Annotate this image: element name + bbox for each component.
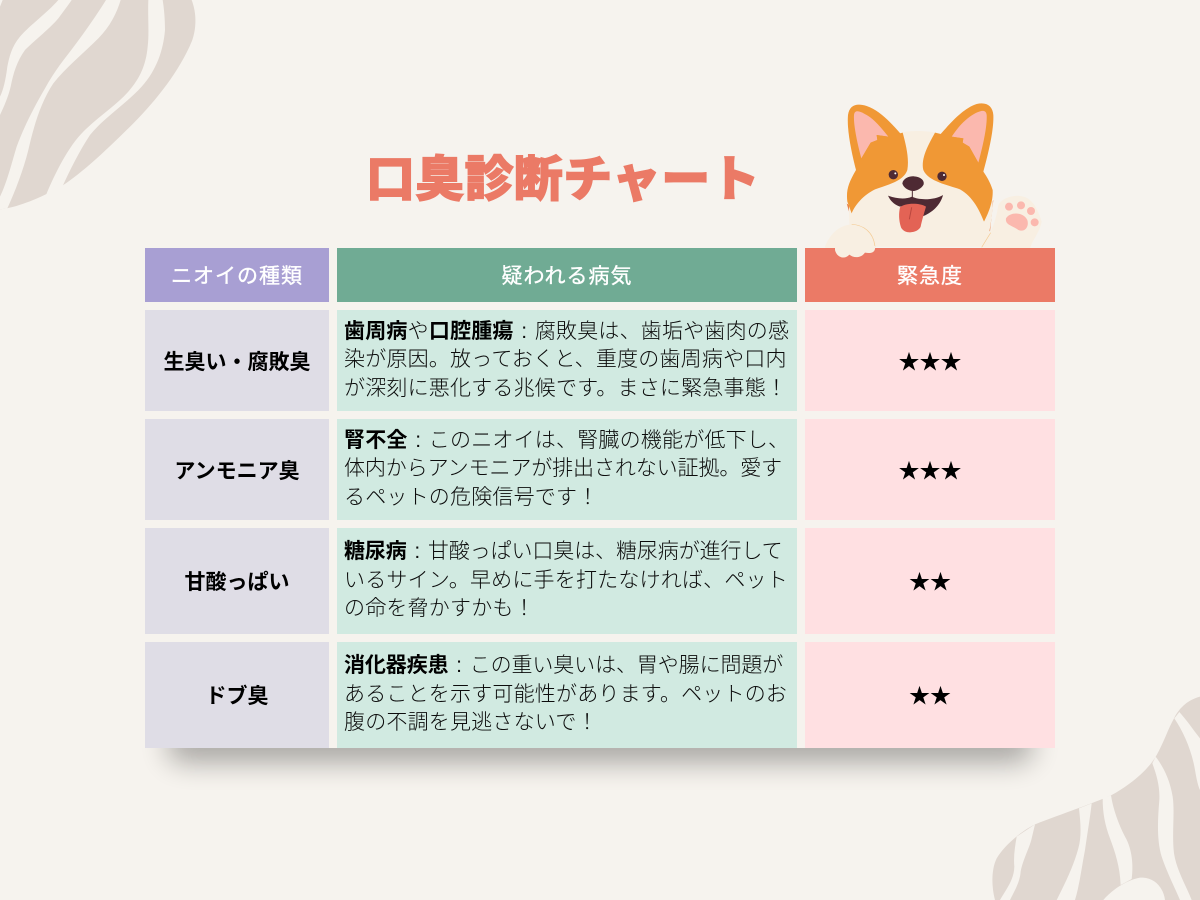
- table drop shadow: [154, 748, 1046, 779]
- dog left paw over header: [835, 246, 876, 258]
- row 2 disease: :: [415, 429, 421, 452]
- dog left paw outline: [852, 224, 875, 247]
- dog tongue line: [909, 207, 912, 219]
- row 3 disease: の命を脅かすかも！: [344, 597, 535, 620]
- row 3 smell: [145, 528, 329, 634]
- row 3 disease: いるサイン。早めに手を打たなければ、ペット: [344, 569, 788, 592]
- dog left ear: [848, 105, 902, 170]
- header: urgency: 緊急度: [897, 265, 963, 288]
- dog eyes: [889, 170, 947, 181]
- row 3 urgency stars: [805, 528, 1055, 634]
- row 4 urgency stars: [805, 642, 1055, 748]
- header: smell type: [145, 248, 329, 302]
- paw pad: [1006, 214, 1028, 231]
- dog right inner ear: [952, 111, 987, 163]
- row 4 urgency stars: ★★: [909, 680, 951, 710]
- row 4 disease: [337, 642, 797, 748]
- row 2 disease: るペットの危険信号です！: [344, 486, 598, 509]
- header: suspected disease: 疑われる病気: [502, 265, 632, 288]
- row 3 disease: 糖尿病 甘酸っぱい口臭は、糖尿病が進行して: [344, 540, 783, 563]
- header: suspected disease: [337, 248, 797, 302]
- row 4 smell: [145, 642, 329, 748]
- dog right orange patch: [923, 133, 993, 222]
- row 1 disease: 歯周病や口腔腫瘍 腐敗臭は、歯垢や歯肉の感: [344, 320, 789, 343]
- row 1 disease: :: [521, 320, 527, 343]
- dog philtrum: [911, 191, 914, 197]
- row 1 smell: 生臭い・腐敗臭: [164, 350, 310, 374]
- row 1 urgency stars: ★★★: [898, 346, 962, 376]
- decorative leaf: top left: [0, 0, 196, 208]
- header: smell type: ニオイの種類: [171, 265, 303, 288]
- row 2 urgency stars: [805, 419, 1055, 520]
- header: urgency: [805, 248, 1055, 302]
- row 4 disease: :: [456, 654, 462, 677]
- decorative leaf: bottom right: [992, 696, 1200, 900]
- dog right ear: [941, 103, 993, 172]
- row 4 disease: あることを示す可能性があります。ペットのお: [344, 683, 787, 706]
- dog left inner ear: [854, 111, 888, 158]
- row 4 disease: 消化器疾患 この重い臭いは、胃や腸に問題が: [344, 654, 783, 677]
- row 4 disease: 腹の不調を見逃さないで！: [344, 711, 598, 734]
- row 3 disease: :: [414, 540, 420, 563]
- dog back shading: [847, 200, 993, 232]
- dog left paw: [825, 224, 875, 250]
- row 1 urgency stars: [805, 310, 1055, 411]
- dog right paw: [982, 196, 1042, 248]
- row 2 disease: [337, 419, 797, 520]
- dog left orange patch: [847, 133, 908, 213]
- dog nose: [902, 176, 924, 191]
- row 3 disease: [337, 528, 797, 634]
- row 4 smell: ドブ臭: [206, 685, 268, 708]
- row 1 smell: [145, 310, 329, 411]
- row 2 smell: [145, 419, 329, 520]
- row 3 smell: 甘酸っぱい: [184, 571, 290, 594]
- row 1 disease: 染が原因。放っておくと、重度の歯周病や口内: [344, 348, 787, 371]
- row 3 urgency stars: ★★: [909, 566, 951, 596]
- dog head: [849, 131, 993, 247]
- row 2 urgency stars: ★★★: [898, 454, 962, 484]
- row 2 disease: 腎不全 このニオイは、腎臓の機能が低下し、: [344, 429, 789, 452]
- title: 口臭診断チャート: [366, 153, 760, 207]
- dog right paw outline: [982, 233, 991, 247]
- row 1 disease: [337, 310, 797, 411]
- illustration: corgi: [825, 103, 1042, 248]
- row 2 smell: アンモニア臭: [174, 460, 300, 482]
- paw toes: [1005, 201, 1039, 226]
- row 2 disease: 体内からアンモニアが排出されない証拠。愛す: [344, 457, 782, 480]
- dog tongue: [899, 204, 926, 232]
- row 1 disease: が深刻に悪化する兆候です。まさに緊急事態！: [344, 377, 787, 400]
- dog mouth: [888, 195, 943, 217]
